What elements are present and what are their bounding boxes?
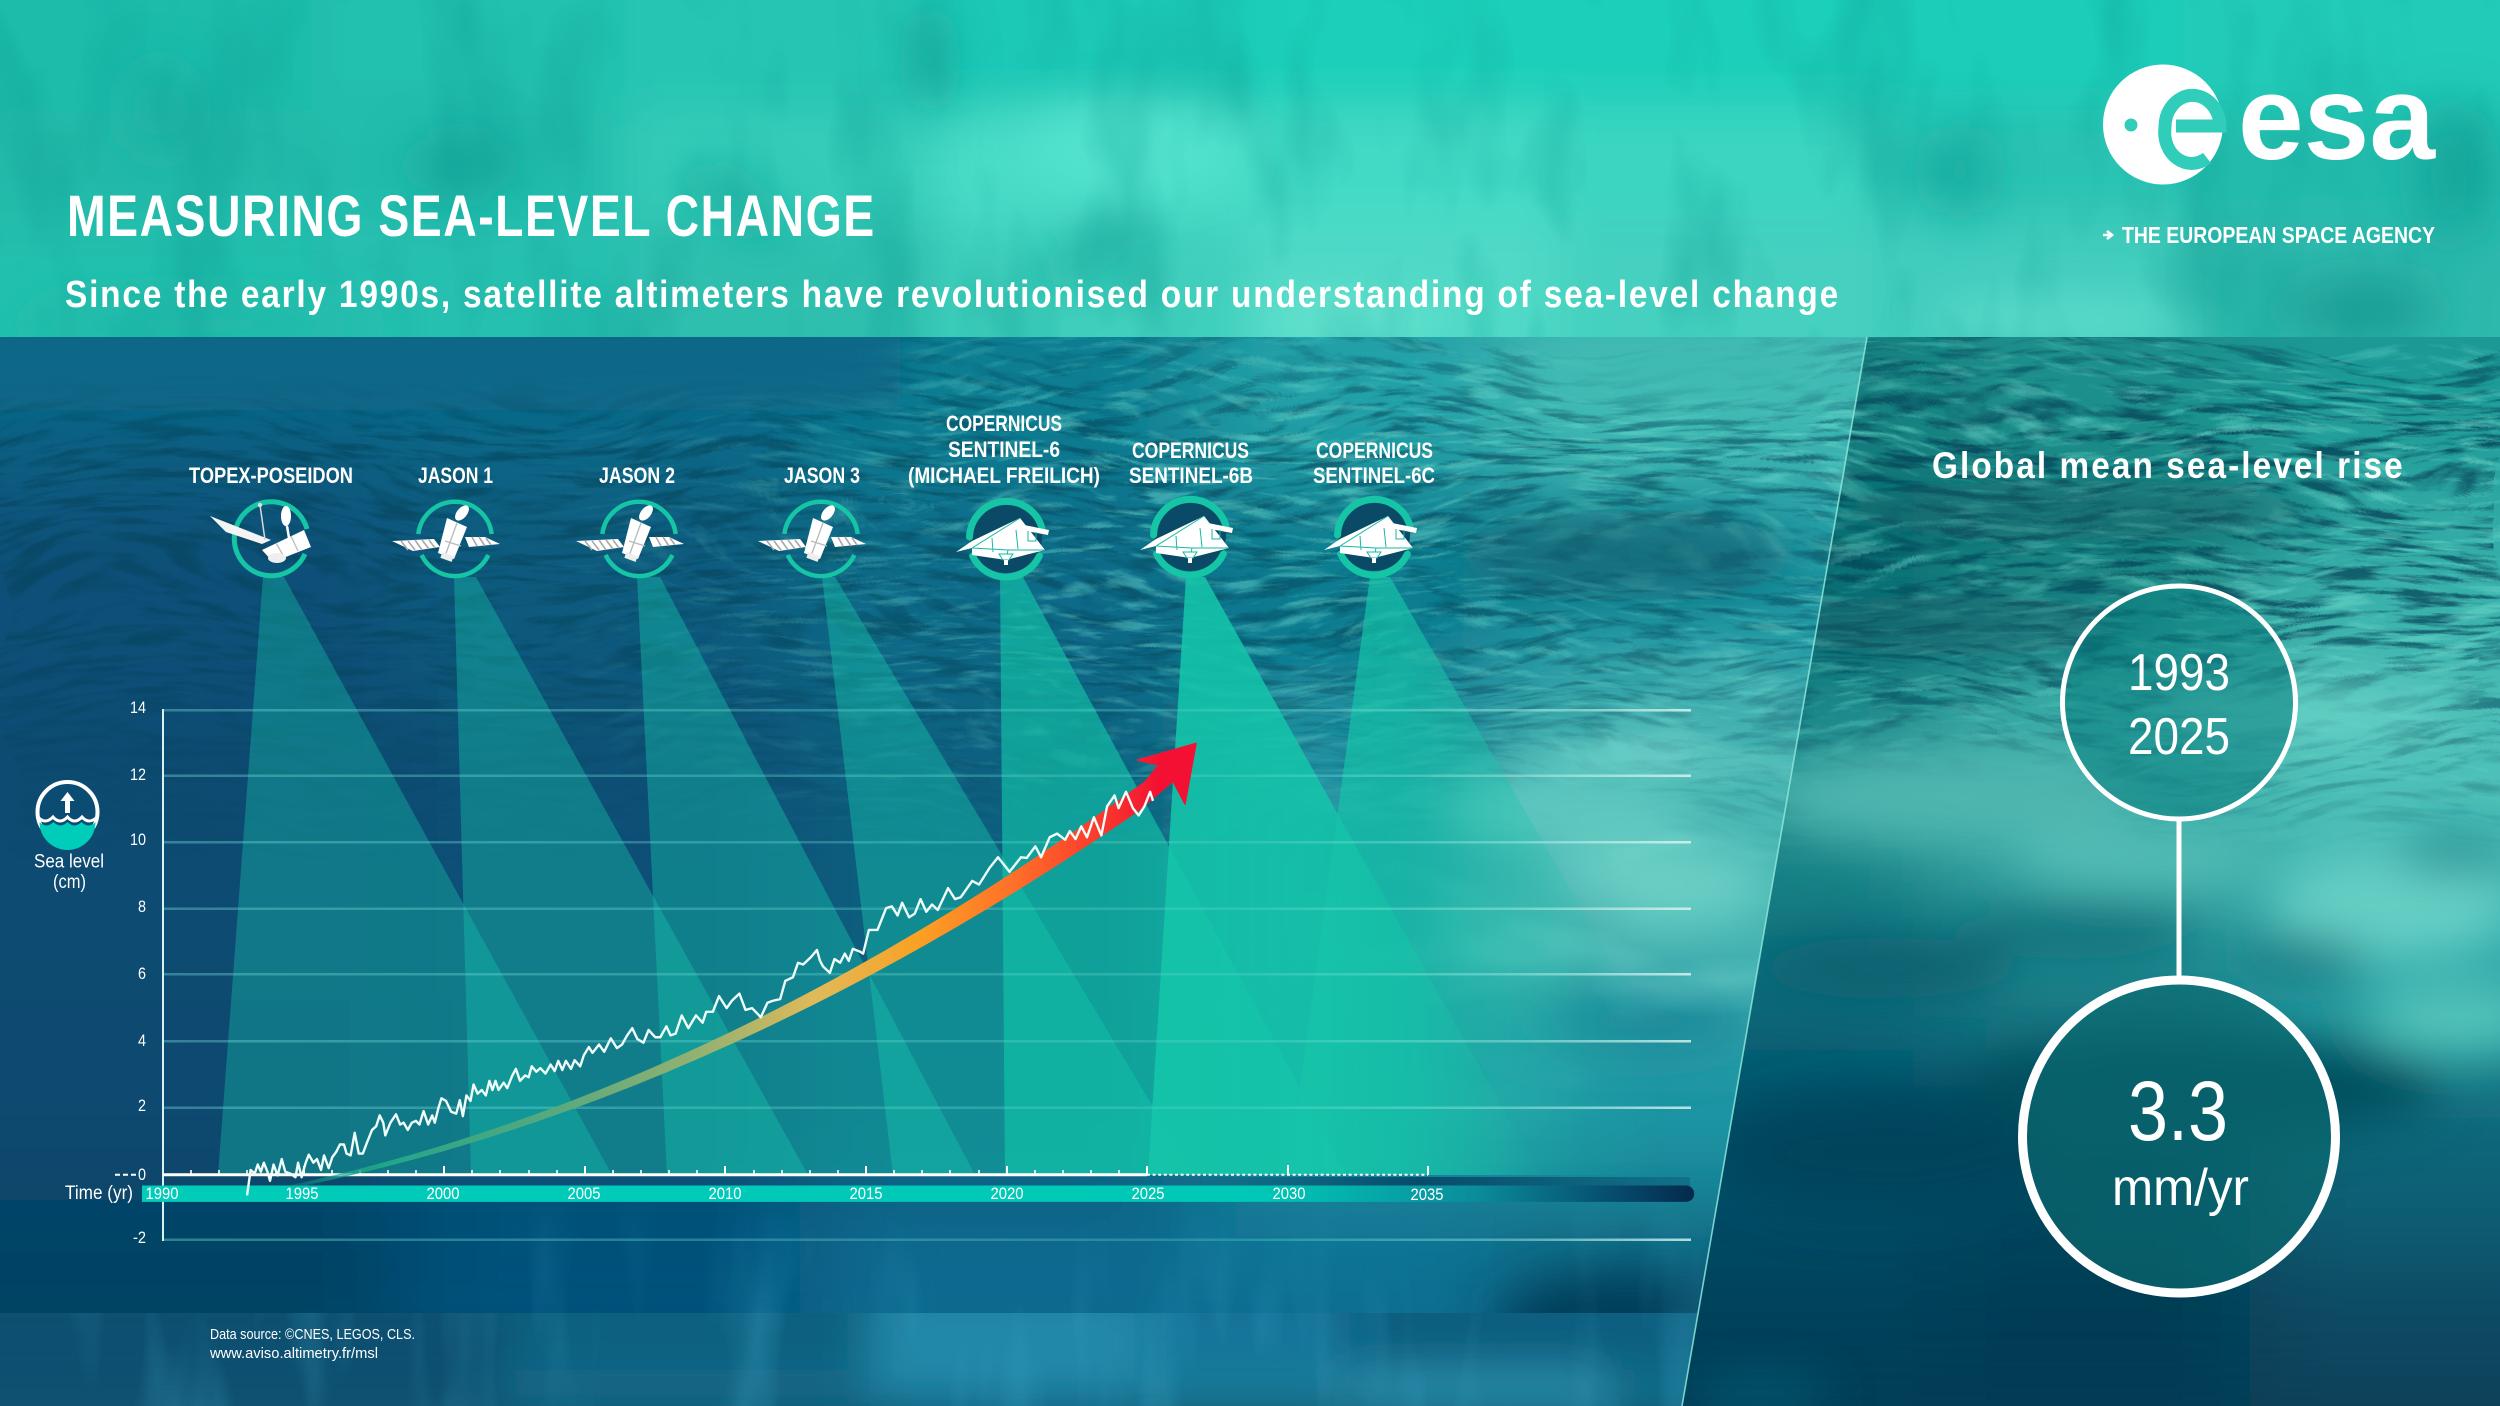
satellite label: Jason 2: JASON 2: [599, 463, 675, 488]
ESA logo: esa: [2238, 51, 2436, 185]
satellite label: Copernicus Sentinel-6B: SENTINEL-6B: [1129, 463, 1253, 488]
data source: [209, 1326, 415, 1362]
y axis labels: 0: [138, 1165, 146, 1184]
zero axis with ticks: [115, 1165, 1428, 1175]
satellite label: Copernicus Sentinel-6 Michael Freilich: SENTINEL-6: [948, 437, 1060, 462]
satellite label: Copernicus Sentinel-6 Michael Freilich: [908, 411, 1100, 488]
axis label: sea level: Sea level: [34, 852, 104, 872]
satellite label: Copernicus Sentinel-6 Michael Freilich: (MICHAEL FREILICH): [908, 463, 1100, 488]
time bar: 2030: [1272, 1184, 1306, 1203]
connector: [2176, 818, 2182, 978]
data source: www.aviso.altimetry.fr/msl: [209, 1345, 378, 1362]
circle: period: 2025: [2128, 708, 2230, 766]
axis label: time: Time (yr): [65, 1183, 133, 1204]
data source: Data source: ©CNES, LEGOS, CLS.: [210, 1326, 415, 1343]
y axis labels: 4: [138, 1031, 146, 1050]
axis label: sea level: [34, 852, 104, 893]
circle: period: 1993: [2128, 644, 2230, 702]
axis label: sea level: (cm): [53, 872, 86, 893]
satellite label: Copernicus Sentinel-6 Michael Freilich: COPERNICUS: [946, 411, 1062, 436]
y axis labels: 2: [138, 1096, 146, 1115]
time bar: 2005: [568, 1184, 600, 1203]
y axis labels: 12: [130, 765, 146, 784]
icon: sea level: [38, 782, 98, 850]
satellite label: Jason 3: JASON 3: [784, 463, 860, 488]
y axis labels: [130, 698, 146, 1247]
satellite label: Copernicus Sentinel-6B: [1129, 438, 1253, 488]
time bar: 2015: [850, 1184, 882, 1203]
title: MEASURING SEA-LEVEL CHANGE: [67, 184, 874, 249]
icon: Sentinel-6B: [1140, 499, 1233, 575]
y axis labels: 6: [138, 964, 146, 983]
agency name: THE EUROPEAN SPACE AGENCY: [2122, 222, 2435, 248]
icon: Sentinel-6 Michael Freilich: [956, 501, 1049, 577]
satellite beams: [218, 577, 1735, 1175]
circle: rate: mm/yr: [2112, 1159, 2249, 1217]
background: right panel: [1682, 337, 2500, 1406]
satellite label: Copernicus Sentinel-6C: SENTINEL-6C: [1313, 463, 1435, 488]
time bar: 2000: [426, 1184, 460, 1203]
subtitle: Since the early 1990s, satellite altimeters have revolutionised our understanding of sea-level change: [65, 273, 1838, 315]
chart: sea level: [65, 698, 1694, 1247]
icon: Jason 2: [576, 502, 684, 576]
time bar: 2020: [990, 1184, 1024, 1203]
y axis labels: 10: [130, 830, 146, 849]
circle: rate: [2022, 980, 2336, 1293]
y axis labels: 14: [130, 698, 146, 717]
sea-level data line: [247, 792, 1153, 1195]
icon: Jason 1: [392, 502, 500, 576]
background: top ocean band: [0, 0, 2500, 337]
time bar: [142, 1177, 1694, 1204]
panel heading: global mean sea-level rise: Global mean sea-level rise: [1932, 445, 2403, 486]
background: dark chart panel: [0, 337, 1867, 1313]
satellite label: Copernicus Sentinel-6B: COPERNICUS: [1132, 438, 1249, 463]
satellite label: Copernicus Sentinel-6C: COPERNICUS: [1316, 438, 1433, 463]
y axis labels: -2: [133, 1228, 146, 1247]
y axis labels: 8: [138, 897, 146, 916]
satellite label: TOPEX-Poseidon: TOPEX-POSEIDON: [189, 463, 353, 488]
time bar: 2010: [708, 1184, 742, 1203]
satellite label: Copernicus Sentinel-6C: [1313, 438, 1435, 488]
trend arrow: [290, 744, 1196, 1188]
ESA logo: [2103, 51, 2436, 185]
icon: TOPEX-Poseidon: [210, 502, 311, 576]
time bar: 1995: [286, 1184, 318, 1203]
satellite label: Jason 1: JASON 1: [418, 463, 493, 488]
circle: rate: 3.3: [2128, 1064, 2228, 1158]
time bar: 1990: [146, 1184, 178, 1203]
icon: Jason 3: [758, 502, 866, 576]
time bar: 2025: [1132, 1184, 1164, 1203]
time bar: 2035: [1410, 1185, 1444, 1204]
circle: period: [2062, 586, 2296, 819]
background: bottom strip: [0, 1313, 1698, 1406]
icon: Sentinel-6C: [1324, 499, 1417, 575]
